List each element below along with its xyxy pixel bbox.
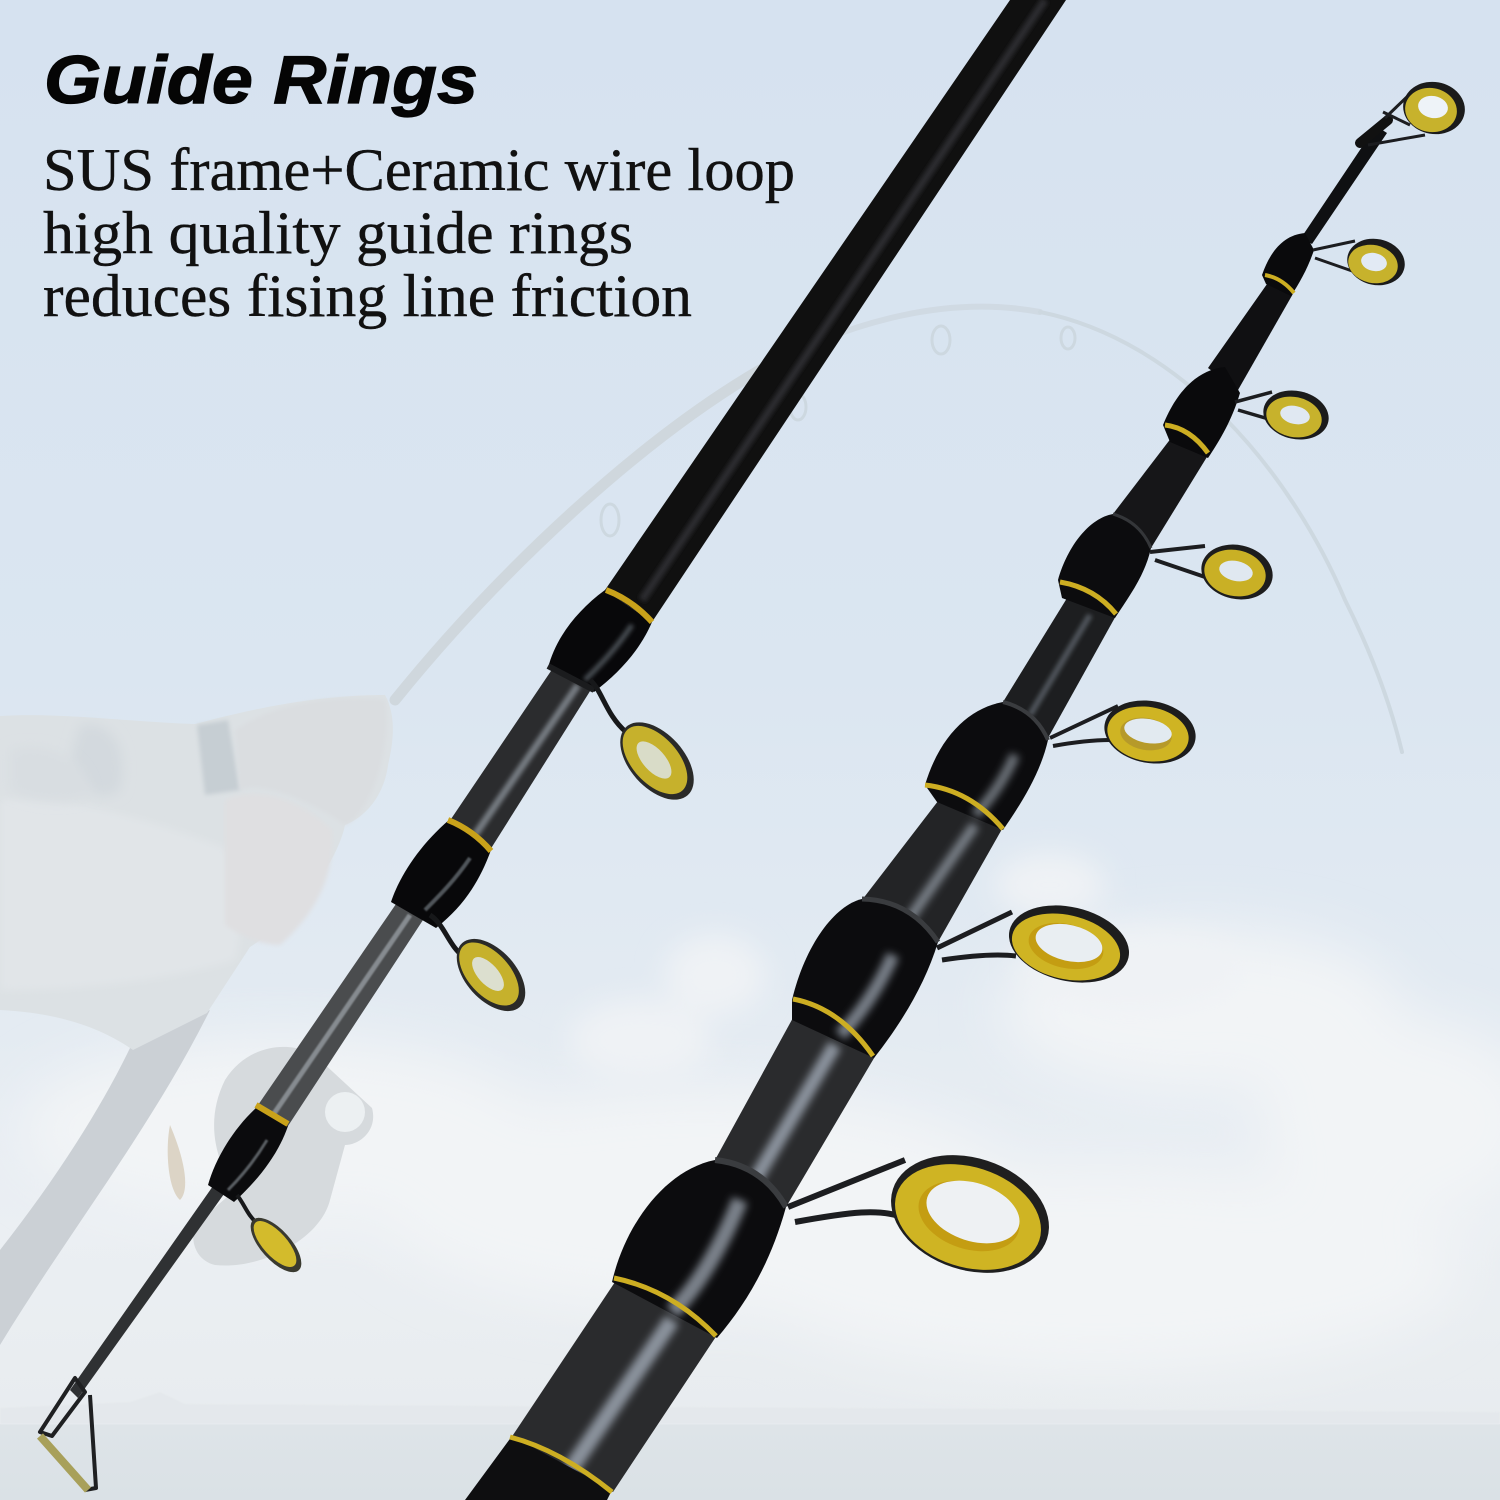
guide ring 3 [1235,385,1333,445]
rod section 1 [605,0,1066,622]
section 1 [511,1267,727,1492]
guide ring 4 [1150,538,1278,606]
rod section 3 [256,904,423,1126]
ferrule 3 [208,1107,288,1202]
tip guide triangle [40,1378,96,1490]
ferrule 6 [1262,233,1314,296]
left telescopic rod [40,0,1066,1490]
description text: high quality guide rings [43,200,633,266]
description text: reduces fising line friction [43,263,692,329]
ghost arm and hands [0,695,393,1050]
rod section 2 [449,668,592,850]
ferrule 3 [925,702,1048,830]
ferrule 1 [548,590,652,692]
section 2 [715,1005,880,1207]
big ferrule [612,1160,786,1338]
ghost rod arc [395,307,1402,752]
section 5 [1113,433,1210,548]
ferrule 4 [1058,514,1151,618]
guide ring 7 [788,1136,1064,1292]
guide ring left 2 [430,915,538,1024]
guide ring left 1 [590,680,708,813]
gold band 3 [256,1105,288,1124]
gold band 2 [448,820,491,851]
sea horizon [0,1392,1500,1500]
guide ring 2 [1313,233,1409,291]
ferrule 2 [792,899,938,1058]
bottom ferrule [465,1436,612,1500]
ghost butt section [0,1010,210,1345]
description text: SUS frame+Ceramic wire loop [43,137,795,203]
guide ring left 3 [237,1195,310,1280]
section 4 [1003,590,1118,738]
ferrule 2 [391,820,491,928]
description text [43,137,795,329]
gold bands [510,275,1294,1492]
title: Guide Rings [44,42,478,118]
clouds [20,853,1500,1370]
faded background angler [0,307,1402,1345]
right telescopic rod [465,77,1469,1500]
gold band 1 [606,590,652,622]
tip section [1301,126,1387,244]
guide ring 6 [937,894,1137,994]
ferrule 5 [1163,367,1240,458]
section 3 [862,792,1006,942]
guide ring 5 [1050,693,1201,771]
tip guide ring [1368,77,1469,145]
section 6 [1208,277,1294,390]
ghost reel [193,1047,373,1266]
rod section 4 [70,1186,224,1398]
